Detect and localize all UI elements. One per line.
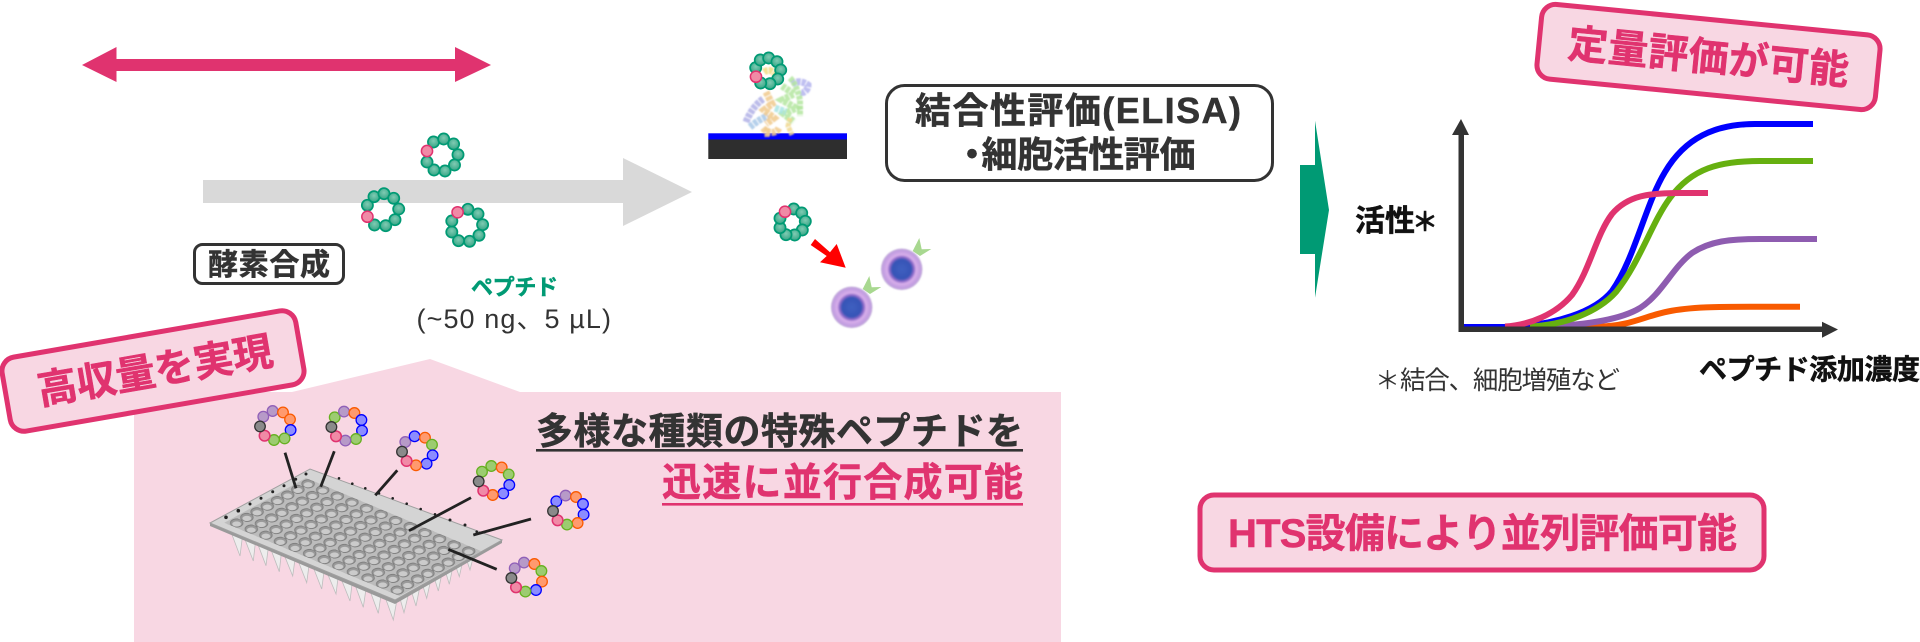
label: peptide amount: (~50 ng、5 µL) bbox=[416, 304, 611, 334]
badge: high yield: 高収量を実現 bbox=[34, 330, 276, 414]
box: evaluation methods: 細胞活性評価 bbox=[982, 134, 1196, 175]
box: evaluation methods: ・ bbox=[954, 134, 990, 175]
footnote: 結合、細胞増殖など bbox=[1400, 367, 1620, 395]
green arrow bbox=[1300, 121, 1329, 298]
y-axis label: ＊ bbox=[1412, 207, 1438, 237]
coloured peptide ring B bbox=[326, 406, 367, 446]
badge: HTS: HTS設備により並列評価可能 bbox=[1228, 512, 1737, 556]
icon: ELISA plate surface bbox=[708, 133, 847, 159]
icon: cell lower bbox=[831, 276, 881, 328]
chart: dose-response curves bbox=[1452, 119, 1838, 338]
badge: high yield bbox=[0, 309, 306, 433]
heading line 1: 多様な種類の特殊ペプチドを bbox=[536, 411, 1023, 452]
label: peptide: ペプチド bbox=[471, 275, 558, 300]
x-axis label: ペプチド添加濃度 bbox=[1699, 354, 1920, 385]
icon: target protein bbox=[746, 70, 808, 137]
peptide ring top bbox=[421, 133, 464, 177]
box: evaluation methods: 結合性評価(ELISA) bbox=[915, 90, 1241, 131]
peptide ring near cells bbox=[774, 203, 811, 241]
y-axis label: 活性 bbox=[1355, 205, 1415, 238]
curve: green bbox=[1530, 161, 1813, 326]
grey process arrow bbox=[203, 158, 692, 226]
panel: parallel synthesis callout bbox=[134, 359, 1061, 642]
peptide ring left bbox=[362, 188, 404, 231]
double-headed pink arrow bbox=[82, 47, 491, 82]
plate tips bbox=[231, 532, 474, 620]
plate index marks bbox=[224, 472, 478, 533]
badge: quantitative evaluation: 定量評価が可能 bbox=[1566, 22, 1851, 94]
well plate bbox=[210, 469, 502, 620]
coloured peptide ring F bbox=[506, 557, 547, 597]
peptide ring right bbox=[446, 204, 488, 247]
coloured peptide ring A bbox=[255, 406, 296, 445]
label: enzymatic synthesis bbox=[194, 244, 344, 284]
leader lines bbox=[285, 451, 531, 569]
curve: orange bbox=[1540, 307, 1800, 326]
badge: HTS bbox=[1200, 495, 1764, 570]
label: enzymatic synthesis: 酵素合成 bbox=[208, 249, 330, 282]
red arrow bbox=[811, 239, 846, 268]
coloured peptide ring E bbox=[548, 490, 589, 530]
icon: cell upper bbox=[881, 238, 931, 290]
coloured peptide ring C bbox=[397, 431, 438, 471]
curve: blue bbox=[1464, 124, 1813, 327]
curve: pink bbox=[1505, 193, 1708, 326]
peptide ring on protein bbox=[750, 52, 786, 89]
axes bbox=[1452, 119, 1838, 338]
footnote: ＊ bbox=[1375, 367, 1400, 395]
curve: purple bbox=[1545, 239, 1817, 326]
heading line 2: 迅速に並行合成可能 bbox=[662, 462, 1023, 505]
coloured peptide ring D bbox=[473, 461, 515, 500]
badge: quantitative evaluation bbox=[1536, 3, 1881, 111]
box: evaluation methods bbox=[886, 86, 1272, 180]
